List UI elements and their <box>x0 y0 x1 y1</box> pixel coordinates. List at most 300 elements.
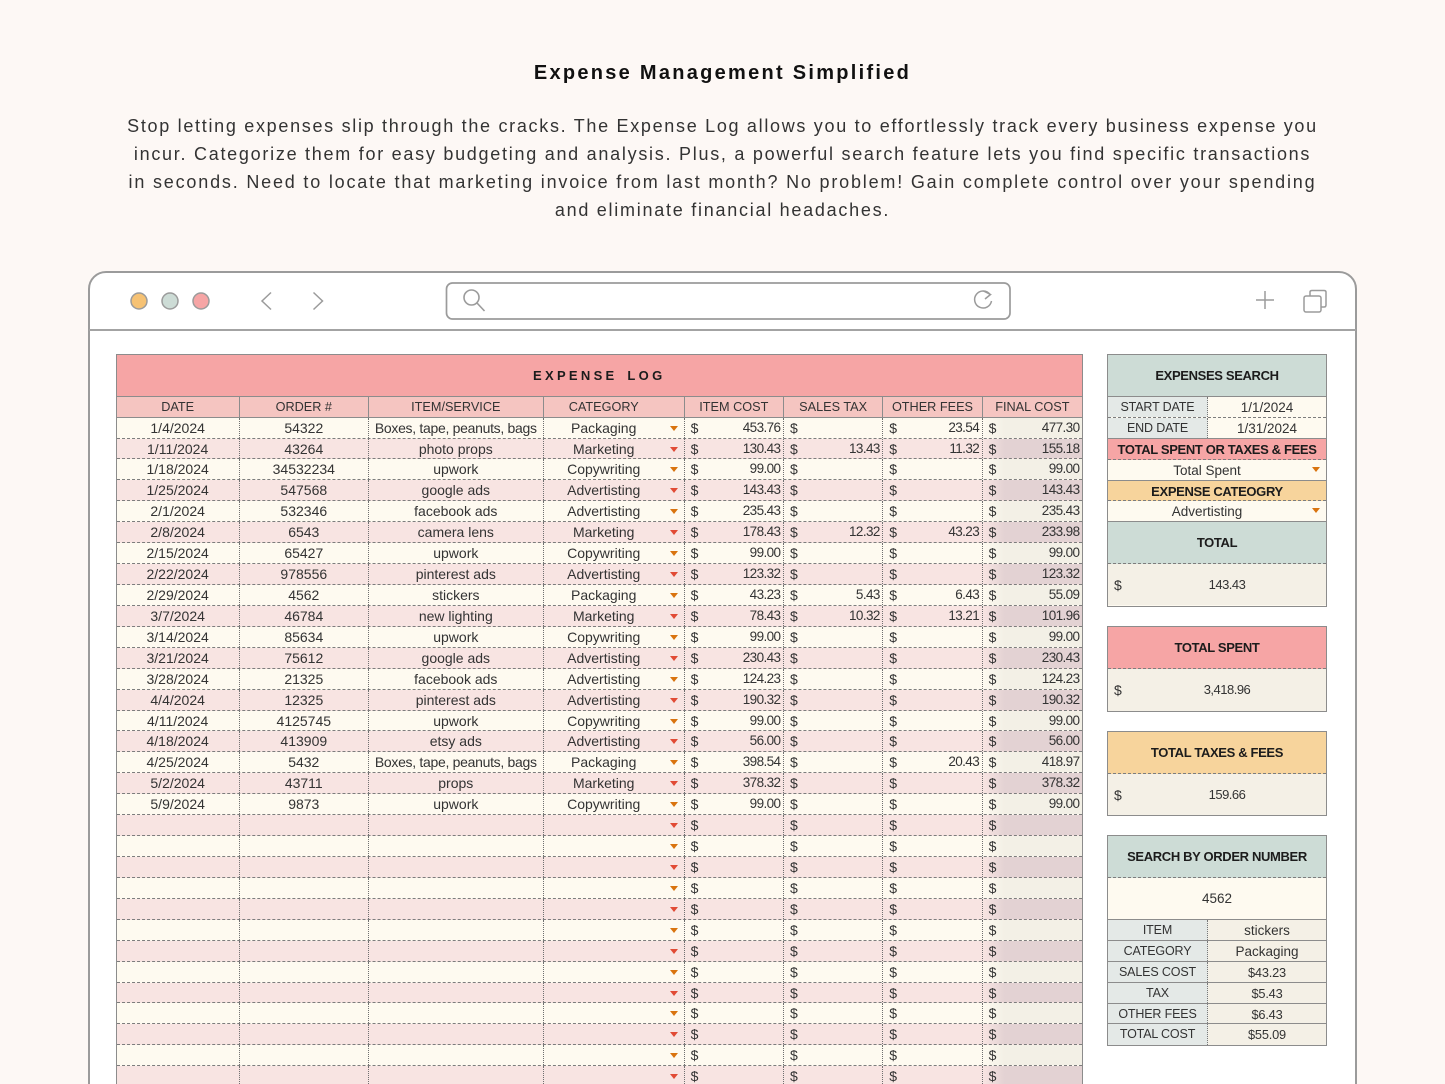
row: 1/11/2024: 11.32 <box>949 441 979 456</box>
row: 2/29/2024: 4562 <box>288 587 319 603</box>
empty rows: $ <box>889 1005 897 1021</box>
heading: total spent: TOTAL SPENT <box>1174 640 1260 655</box>
row: 1/18/2024: $ <box>989 461 996 477</box>
dropdown: total spent: Total Spent <box>1173 463 1241 478</box>
row: 3/7/2024: 78.43 <box>750 608 780 623</box>
row: 2/29/2024: stickers <box>432 587 480 603</box>
row: 3/14/2024: 99.00 <box>750 629 780 644</box>
row: 4/25/2024: 418.97 <box>1042 754 1079 769</box>
row: 3/14/2024: $ <box>989 629 996 645</box>
table header row: ORDER # <box>276 400 332 414</box>
row: 2/15/2024: Copywriting <box>567 545 640 561</box>
row: 3/28/2024 <box>116 669 1082 690</box>
row: 1/4/2024: $ <box>989 420 996 436</box>
row: 2/8/2024: 6543 <box>288 524 319 540</box>
heading: total spent <box>1108 627 1326 669</box>
row: 4/4/2024: $ <box>691 692 698 708</box>
total taxes value: $ <box>1114 786 1122 802</box>
total spent value: 3,418.96 <box>1204 682 1250 697</box>
row: 4/4/2024: pinterest ads <box>416 692 496 708</box>
row: 1/25/2024 <box>116 480 1082 501</box>
row: 4/18/2024: 56.00 <box>750 733 780 748</box>
row: 3/7/2024: Marketing <box>573 608 634 624</box>
row: 1/11/2024: 13.43 <box>849 441 880 456</box>
row: 2/29/2024: Packaging <box>571 587 636 603</box>
browser window frame <box>88 271 1357 1084</box>
row: 2/15/2024: upwork <box>433 545 478 561</box>
row: 4/18/2024 <box>116 731 1082 752</box>
empty rows: $ <box>989 1047 996 1063</box>
intro paragraph: and eliminate financial headaches. <box>555 200 890 220</box>
row: 2/15/2024 <box>116 543 1082 564</box>
row: 1/11/2024: $ <box>790 441 798 457</box>
row: 5/2/2024: $ <box>691 775 698 791</box>
row: 1/11/2024: photo props <box>419 441 493 457</box>
row: 3/21/2024: 230.43 <box>1042 650 1079 665</box>
empty rows: $ <box>889 964 897 980</box>
row: 2/15/2024: 99.00 <box>1049 545 1079 560</box>
total cost: TOTAL COST <box>1120 1027 1195 1041</box>
row: 4/25/2024: $ <box>691 754 698 770</box>
row: 4/25/2024: 5432 <box>288 754 319 770</box>
start date <box>1108 397 1326 418</box>
empty rows: $ <box>790 838 798 854</box>
row: 4/18/2024: 4/18/2024 <box>146 733 209 749</box>
row: 2/15/2024: $ <box>989 545 996 561</box>
empty rows: $ <box>691 859 698 875</box>
heading: expense category: EXPENSE CATEOGRY <box>1151 484 1283 499</box>
panel: search by order number <box>1107 835 1327 1046</box>
row: 1/4/2024: $ <box>691 420 698 436</box>
heading: total <box>1108 522 1326 564</box>
heading: total: TOTAL <box>1197 535 1237 550</box>
end date: END DATE <box>1127 421 1188 435</box>
row: 1/18/2024: 34532234 <box>273 461 335 477</box>
total value: $ <box>1114 577 1122 593</box>
row: 5/2/2024: 378.32 <box>1042 775 1079 790</box>
row: 2/8/2024: 43.23 <box>948 524 979 539</box>
row: 2/8/2024: 12.32 <box>849 524 880 539</box>
empty rows: $ <box>889 943 897 959</box>
row: 5/9/2024: $ <box>889 796 897 812</box>
row: 5/9/2024: 99.00 <box>1049 796 1079 811</box>
heading: expense category <box>1108 481 1326 501</box>
row: 5/9/2024 <box>116 794 1082 815</box>
row: 2/22/2024: pinterest ads <box>416 566 496 582</box>
row: 1/4/2024: 477.30 <box>1042 420 1079 435</box>
row: 4/11/2024: Copywriting <box>567 713 640 729</box>
empty rows: $ <box>691 1068 698 1084</box>
total cost <box>1108 1024 1326 1045</box>
row: 5/2/2024 <box>116 773 1082 794</box>
row: 1/25/2024: 143.43 <box>1042 482 1079 497</box>
row: 1/11/2024: 130.43 <box>743 441 780 456</box>
empty rows: $ <box>889 859 897 875</box>
empty rows: $ <box>691 901 698 917</box>
sales cost: $43.23 <box>1248 965 1286 980</box>
row: 1/4/2024 <box>116 418 1082 439</box>
empty rows: $ <box>790 1047 798 1063</box>
row: 4/4/2024: 4/4/2024 <box>150 692 205 708</box>
row: 5/2/2024: $ <box>989 775 996 791</box>
row: 2/8/2024: $ <box>989 524 996 540</box>
row: 4/25/2024: Packaging <box>571 754 636 770</box>
row: 2/1/2024 <box>116 501 1082 522</box>
row: 1/11/2024: $ <box>889 441 897 457</box>
row: 2/22/2024: $ <box>790 566 798 582</box>
row: 4/4/2024: 190.32 <box>1042 692 1079 707</box>
row: 2/8/2024: 233.98 <box>1042 524 1079 539</box>
table header row: SALES TAX <box>799 400 867 414</box>
row: 4/11/2024: 99.00 <box>750 713 780 728</box>
row: 2/29/2024: $ <box>790 587 798 603</box>
order number input: 4562 <box>1202 891 1232 906</box>
end date <box>1108 418 1326 439</box>
total spent value: $ <box>1114 682 1122 698</box>
other fees: $6.43 <box>1251 1007 1283 1022</box>
row: 3/28/2024: $ <box>790 671 798 687</box>
row: 3/7/2024: 46784 <box>284 608 323 624</box>
search bar <box>446 283 1010 319</box>
row: 3/7/2024 <box>116 606 1082 627</box>
table title: EXPENSE LOG <box>533 368 666 383</box>
row: 4/18/2024: $ <box>691 733 698 749</box>
intro paragraph: in seconds. Need to locate that marketing invoice from last month? No problem! Gain complete control over your spending <box>129 172 1316 192</box>
row: 2/22/2024: 2/22/2024 <box>146 566 209 582</box>
row: 2/29/2024: $ <box>989 587 996 603</box>
row: 5/9/2024: $ <box>790 796 798 812</box>
row: 4/11/2024: $ <box>989 713 996 729</box>
empty rows: $ <box>691 922 698 938</box>
row: 4/25/2024: 4/25/2024 <box>146 754 209 770</box>
row: 2/15/2024: 99.00 <box>750 545 780 560</box>
empty rows: $ <box>790 1068 798 1084</box>
row: 1/18/2024 <box>116 459 1082 480</box>
empty rows: $ <box>790 901 798 917</box>
row: 1/25/2024: $ <box>790 482 798 498</box>
total cost: $55.09 <box>1248 1027 1286 1042</box>
row: 4/25/2024: 398.54 <box>743 754 780 769</box>
intro paragraph: incur. Categorize them for easy budgeting and analysis. Plus, a powerful search feature lets you find specific transactions <box>134 144 1311 164</box>
row: 3/14/2024: upwork <box>433 629 478 645</box>
empty rows: $ <box>889 1047 897 1063</box>
row: 2/8/2024: 178.43 <box>743 524 780 539</box>
row: 2/1/2024: facebook ads <box>414 503 497 519</box>
row: 5/2/2024: 378.32 <box>743 775 780 790</box>
row: 1/18/2024: upwork <box>433 461 478 477</box>
row: 5/9/2024: $ <box>989 796 996 812</box>
row: 1/11/2024: 1/11/2024 <box>147 441 208 457</box>
empty rows: $ <box>889 901 897 917</box>
heading: expenses search: EXPENSES SEARCH <box>1155 368 1279 383</box>
icon: back arrow <box>262 292 271 310</box>
row: 1/25/2024: $ <box>989 482 996 498</box>
row: 4/25/2024: 20.43 <box>948 754 979 769</box>
row: 3/28/2024: 3/28/2024 <box>146 671 209 687</box>
row: 2/8/2024: 2/8/2024 <box>150 524 205 540</box>
panel: total taxes and fees <box>1107 730 1327 816</box>
row: 1/11/2024: $ <box>989 441 996 457</box>
row: 4/11/2024: 4/11/2024 <box>147 713 208 729</box>
row: 3/28/2024: Advertisting <box>567 671 640 687</box>
heading: expenses search <box>1108 355 1326 397</box>
row: 5/2/2024: 43711 <box>285 775 323 791</box>
table header row <box>116 397 1082 418</box>
row: 2/29/2024: 43.23 <box>750 587 780 602</box>
row: 3/14/2024: 3/14/2024 <box>146 629 209 645</box>
row: 4/25/2024: Boxes, tape, peanuts, bags <box>375 754 537 770</box>
row: 1/25/2024: Advertisting <box>567 482 640 498</box>
dropdown: advertising <box>1108 501 1326 522</box>
row: 5/9/2024: 5/9/2024 <box>150 796 205 812</box>
row: 1/18/2024: $ <box>790 461 798 477</box>
row: 4/11/2024: 4125745 <box>277 713 331 729</box>
start date: 1/1/2024 <box>1241 400 1293 415</box>
row: 3/7/2024: new lighting <box>419 608 493 624</box>
row: 4/18/2024: etsy ads <box>430 733 482 749</box>
empty rows: $ <box>989 984 996 1000</box>
empty rows <box>117 815 1082 1084</box>
icon: forward arrow <box>314 292 322 310</box>
row: 2/22/2024: $ <box>989 566 996 582</box>
row: 1/18/2024: 1/18/2024 <box>146 461 209 477</box>
row: 2/8/2024: $ <box>691 524 698 540</box>
row: 4/4/2024: $ <box>790 692 798 708</box>
empty rows: $ <box>989 817 996 833</box>
empty rows: $ <box>790 1005 798 1021</box>
empty rows: $ <box>790 880 798 896</box>
row: 4/18/2024: $ <box>790 733 798 749</box>
panel: expense log table <box>116 354 1083 1084</box>
icon: green window dot <box>162 293 178 309</box>
row: 3/14/2024: $ <box>889 629 897 645</box>
row: 5/2/2024: 5/2/2024 <box>150 775 205 791</box>
row: 3/21/2024: $ <box>989 650 996 666</box>
icon: plus <box>1256 291 1274 309</box>
row: 3/7/2024: 3/7/2024 <box>150 608 205 624</box>
row: 1/4/2024: 54322 <box>284 420 323 436</box>
row: 4/4/2024: Advertisting <box>567 692 640 708</box>
row: 2/15/2024: $ <box>691 545 698 561</box>
row: 3/28/2024: 21325 <box>284 671 323 687</box>
total value: 143.43 <box>1209 577 1245 592</box>
row: 4/4/2024: $ <box>989 692 996 708</box>
row: 2/15/2024: $ <box>889 545 897 561</box>
row: 2/1/2024: 235.43 <box>1042 503 1079 518</box>
row: 3/14/2024: Copywriting <box>567 629 640 645</box>
row: 3/7/2024: $ <box>691 608 698 624</box>
row: 3/28/2024: facebook ads <box>414 671 497 687</box>
row: 2/29/2024: $ <box>691 587 698 603</box>
row: 4/25/2024 <box>116 752 1082 773</box>
empty rows: $ <box>790 859 798 875</box>
row: 2/1/2024: $ <box>989 503 996 519</box>
row: 3/7/2024: 10.32 <box>849 608 880 623</box>
row: 5/2/2024: $ <box>790 775 798 791</box>
item <box>1108 920 1326 941</box>
row: 2/22/2024: Advertisting <box>567 566 640 582</box>
empty rows: $ <box>989 1026 996 1042</box>
row: 3/21/2024: $ <box>691 650 698 666</box>
row: 1/4/2024: 23.54 <box>948 420 979 435</box>
row: 2/1/2024: $ <box>691 503 698 519</box>
row: 2/8/2024: $ <box>790 524 798 540</box>
item: ITEM <box>1143 923 1172 937</box>
row: 3/28/2024: $ <box>889 671 897 687</box>
row: 1/25/2024: google ads <box>422 482 490 498</box>
row: 2/8/2024 <box>116 522 1082 543</box>
empty rows: $ <box>989 901 996 917</box>
row: 5/2/2024: $ <box>889 775 897 791</box>
row: 4/18/2024: Advertisting <box>567 733 640 749</box>
row: 1/18/2024: 99.00 <box>750 461 780 476</box>
row: 4/18/2024: 56.00 <box>1049 733 1079 748</box>
empty rows: $ <box>989 964 996 980</box>
row: 2/29/2024: $ <box>889 587 897 603</box>
table header row: CATEGORY <box>569 400 639 414</box>
empty rows: $ <box>889 880 897 896</box>
row: 2/15/2024: 65427 <box>284 545 323 561</box>
row: 2/29/2024: 2/29/2024 <box>146 587 209 603</box>
row: 1/4/2024: Packaging <box>571 420 636 436</box>
row: 1/18/2024: 99.00 <box>1049 461 1079 476</box>
row: 1/4/2024: $ <box>790 420 798 436</box>
row: 4/18/2024: $ <box>889 733 897 749</box>
table header row: ITEM/SERVICE <box>411 400 500 414</box>
row: 4/4/2024: 12325 <box>284 692 323 708</box>
row: 2/1/2024: 2/1/2024 <box>150 503 205 519</box>
row: 2/22/2024: $ <box>889 566 897 582</box>
browser toolbar icons <box>130 282 1327 320</box>
row: 1/4/2024: 1/4/2024 <box>150 420 205 436</box>
row: 4/25/2024: $ <box>790 754 798 770</box>
dropdown: advertising: Advertisting <box>1172 504 1242 519</box>
row: 3/28/2024: $ <box>989 671 996 687</box>
row: 1/25/2024: $ <box>691 482 698 498</box>
row: 2/29/2024: 5.43 <box>856 587 880 602</box>
row: 4/11/2024: $ <box>691 713 698 729</box>
row: 3/28/2024: 124.23 <box>743 671 780 686</box>
row: 5/9/2024: $ <box>691 796 698 812</box>
dropdown: total spent <box>1108 460 1326 481</box>
empty rows: $ <box>989 922 996 938</box>
total taxes value <box>1108 774 1326 815</box>
row: 3/28/2024: $ <box>691 671 698 687</box>
icon: pink window dot <box>193 293 209 309</box>
heading: total taxes and fees <box>1108 732 1326 774</box>
row: 3/21/2024: Advertisting <box>567 650 640 666</box>
row: 1/11/2024: 155.18 <box>1042 441 1079 456</box>
row: 3/14/2024: $ <box>691 629 698 645</box>
row: 2/1/2024: 235.43 <box>743 503 780 518</box>
empty rows: $ <box>691 838 698 854</box>
total taxes value: 159.66 <box>1209 786 1245 802</box>
row: 2/22/2024: 978556 <box>280 566 327 582</box>
heading: search by order number: SEARCH BY ORDER NUMBER <box>1127 849 1307 864</box>
sales cost: SALES COST <box>1119 965 1196 979</box>
start date: START DATE <box>1120 400 1194 414</box>
row: 3/7/2024: 13.21 <box>948 608 979 623</box>
icon: copy windows <box>1304 290 1326 312</box>
row: 1/11/2024 <box>116 439 1082 459</box>
empty rows: $ <box>989 1068 996 1084</box>
row: 3/7/2024: $ <box>989 608 996 624</box>
category: Packaging <box>1235 944 1299 959</box>
table header row: OTHER FEES <box>892 400 973 414</box>
empty rows: $ <box>691 984 698 1000</box>
panel: total spent <box>1107 626 1327 712</box>
row: 4/25/2024: $ <box>889 754 897 770</box>
empty rows: $ <box>989 838 996 854</box>
row: 2/29/2024: 55.09 <box>1049 587 1079 602</box>
row: 5/9/2024: 99.00 <box>750 796 780 811</box>
row: 1/25/2024: $ <box>889 482 897 498</box>
table header row: ITEM COST <box>699 400 768 414</box>
empty rows: $ <box>691 964 698 980</box>
sales cost <box>1108 962 1326 983</box>
row: 2/1/2024: $ <box>889 503 897 519</box>
row: 1/11/2024: $ <box>691 441 698 457</box>
heading: total spent or taxes and fees: TOTAL SPENT OR TAXES & FEES <box>1117 442 1317 457</box>
row: 1/11/2024: 43264 <box>284 441 323 457</box>
row: 4/11/2024: 99.00 <box>1049 713 1079 728</box>
other fees <box>1108 1004 1326 1024</box>
row: 2/29/2024 <box>116 585 1082 606</box>
row: 3/21/2024 <box>116 648 1082 669</box>
row: 1/18/2024: $ <box>691 461 698 477</box>
tax <box>1108 983 1326 1004</box>
row: 4/11/2024: $ <box>889 713 897 729</box>
icon: magnifier <box>464 290 484 311</box>
category: CATEGORY <box>1124 944 1191 958</box>
row: 4/18/2024: $ <box>989 733 996 749</box>
row: 4/4/2024: $ <box>889 692 897 708</box>
row: 2/22/2024 <box>116 564 1082 585</box>
icon: orange window dot <box>131 293 147 309</box>
row: 3/21/2024: 75612 <box>284 650 323 666</box>
row: 3/21/2024: $ <box>889 650 897 666</box>
empty rows: $ <box>790 1026 798 1042</box>
row: 4/11/2024: upwork <box>433 713 478 729</box>
table title <box>116 355 1082 397</box>
empty rows: $ <box>889 817 897 833</box>
row: 2/8/2024: camera lens <box>418 524 494 540</box>
row: 5/9/2024: Copywriting <box>567 796 640 812</box>
total value <box>1108 564 1326 605</box>
row: 2/1/2024: Advertisting <box>567 503 640 519</box>
row: 2/8/2024: Marketing <box>573 524 634 540</box>
row: 2/22/2024: $ <box>691 566 698 582</box>
empty rows: $ <box>889 1068 897 1084</box>
row: 1/4/2024: $ <box>889 420 897 436</box>
row: 5/2/2024: Marketing <box>573 775 634 791</box>
row: 4/25/2024: $ <box>989 754 996 770</box>
row: 5/9/2024: 9873 <box>288 796 319 812</box>
row: 1/4/2024: Boxes, tape, peanuts, bags <box>375 420 537 436</box>
row: 1/18/2024: Copywriting <box>567 461 640 477</box>
item: stickers <box>1244 923 1290 938</box>
row: 1/25/2024: 547568 <box>280 482 327 498</box>
row: 3/14/2024: 99.00 <box>1049 629 1079 644</box>
row: 4/11/2024 <box>116 711 1082 731</box>
empty rows: $ <box>889 922 897 938</box>
row: 3/21/2024: google ads <box>422 650 490 666</box>
total spent value <box>1108 669 1326 710</box>
row: 1/4/2024: 453.76 <box>743 420 780 435</box>
row: 5/2/2024: props <box>438 775 473 791</box>
panel: expenses search <box>1107 354 1327 606</box>
intro paragraph <box>127 116 1318 220</box>
